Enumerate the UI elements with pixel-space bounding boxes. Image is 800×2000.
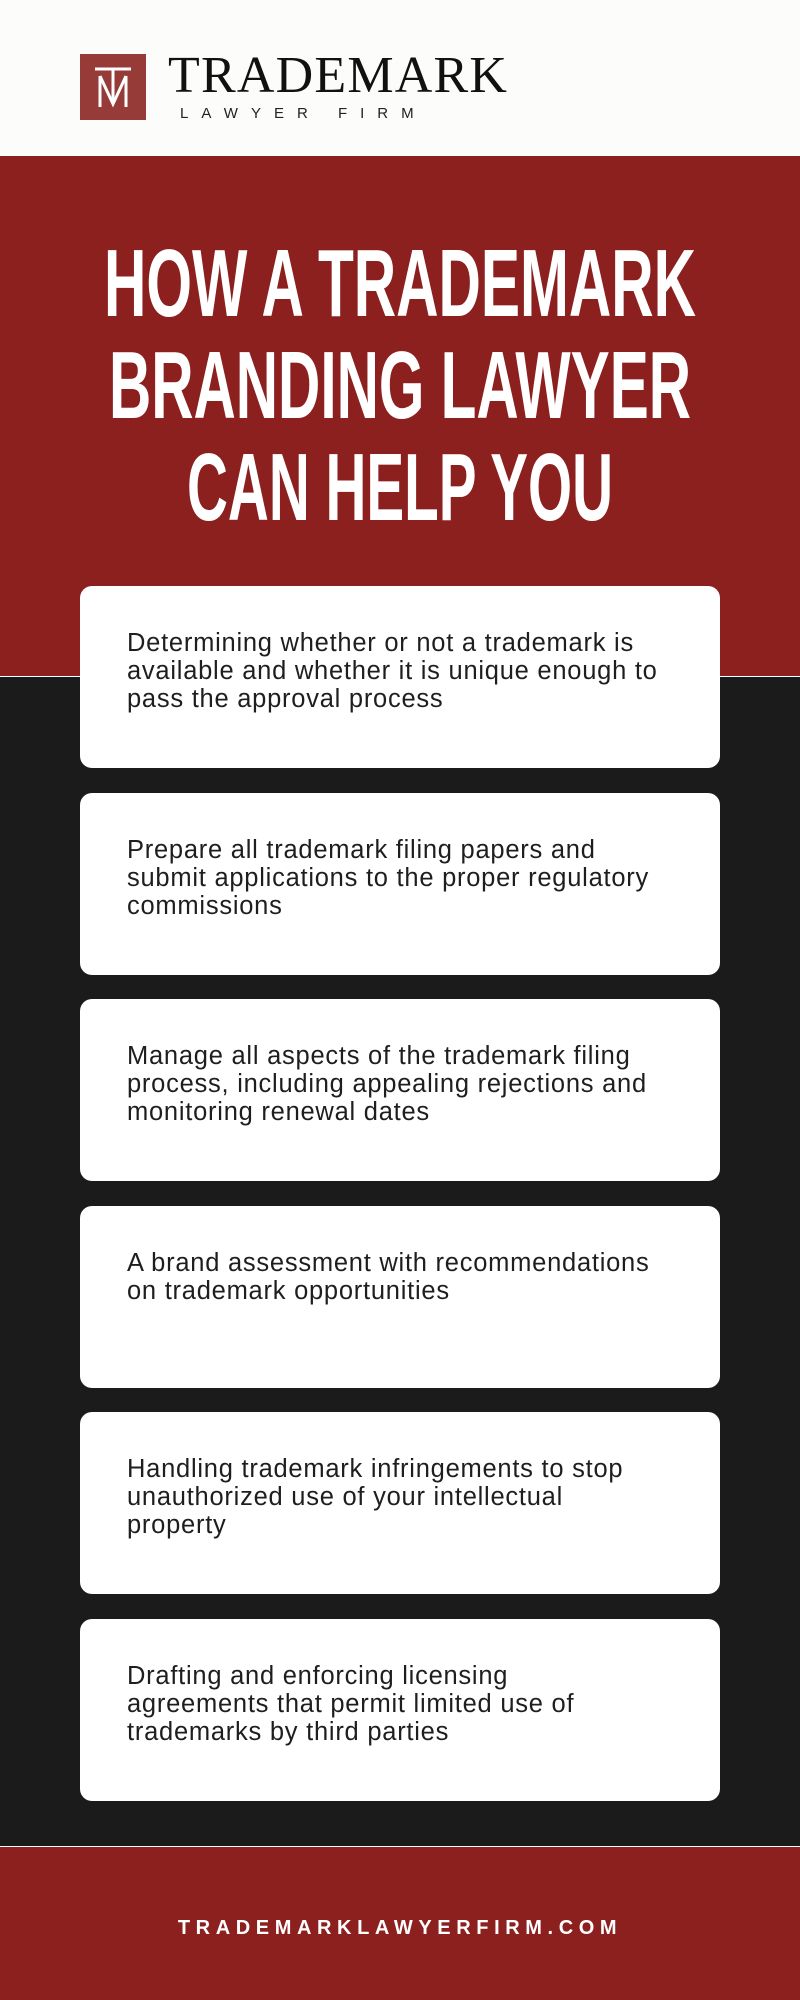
- header: [0, 0, 800, 156]
- logo wordmark: TRADEMARK: [168, 47, 508, 104]
- footer url: TRADEMARKLAWYERFIRM.COM: [178, 1917, 622, 1939]
- card 4: [80, 1206, 720, 1388]
- card 2: commissions: [127, 892, 283, 920]
- card 5: unauthorized use of your intellectual: [127, 1483, 563, 1511]
- card 3: monitoring renewal dates: [127, 1098, 430, 1126]
- icon: TM monogram: [80, 54, 146, 120]
- card 3: [80, 999, 720, 1181]
- card 1: [80, 586, 720, 768]
- card 5: Handling trademark infringements to stop: [127, 1455, 623, 1483]
- footer: [0, 1847, 800, 2000]
- card 4: on trademark opportunities: [127, 1277, 450, 1305]
- logo: [80, 47, 508, 122]
- red title band: [0, 156, 800, 676]
- card 2: Prepare all trademark filing papers and: [127, 836, 596, 864]
- card 6: [80, 1619, 720, 1801]
- card 2: submit applications to the proper regulatory: [127, 864, 649, 892]
- card 6: agreements that permit limited use of: [127, 1690, 574, 1718]
- card 5: [80, 1412, 720, 1594]
- card 2: [80, 793, 720, 975]
- card 1: Determining whether or not a trademark is: [127, 629, 634, 657]
- card 3: process, including appealing rejections and: [127, 1070, 647, 1098]
- card 1: pass the approval process: [127, 685, 443, 713]
- card 3: Manage all aspects of the trademark filing: [127, 1042, 630, 1070]
- card 6: trademarks by third parties: [127, 1718, 449, 1746]
- logo subtitle: LAWYER FIRM: [180, 105, 427, 122]
- card 6: Drafting and enforcing licensing: [127, 1662, 508, 1690]
- card 1: available and whether it is unique enough to: [127, 657, 658, 685]
- card 5: property: [127, 1511, 227, 1539]
- card 4: A brand assessment with recommendations: [127, 1249, 650, 1277]
- title: [104, 230, 696, 540]
